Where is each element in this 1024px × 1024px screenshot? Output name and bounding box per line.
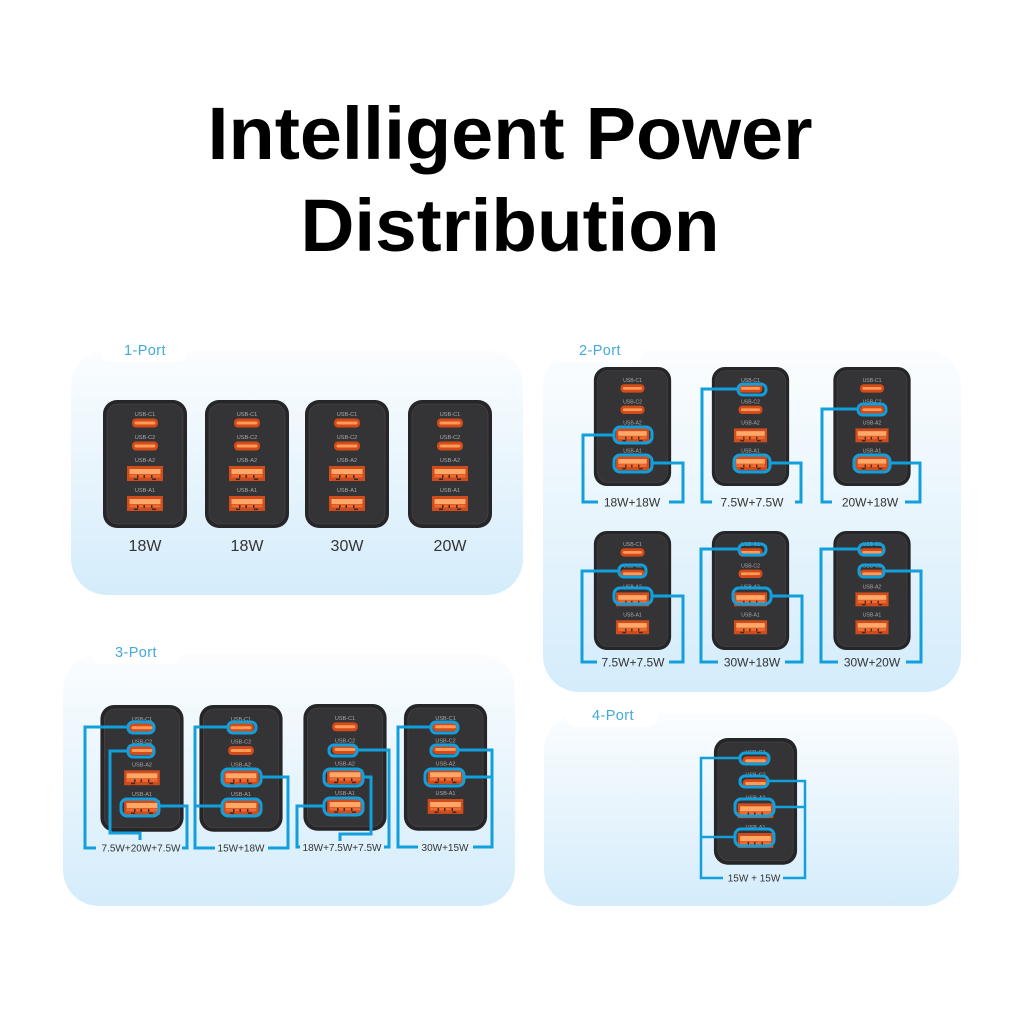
- charger: 18W USB-C2: 18W: [231, 538, 264, 555]
- charger: 18W USB-C1: [103, 400, 187, 555]
- charger: 20W: USB-C2: [440, 435, 460, 441]
- diagram: 30W+20W: USB-C2: [863, 563, 882, 569]
- diagram: 15W + 15W: USB-A2: [746, 795, 765, 801]
- panel: 4-Port: [544, 704, 959, 906]
- panel: 2-Port: [543, 339, 961, 692]
- diagram: 20W+18W: USB-A2: [863, 421, 881, 427]
- diagram: 30W+20W: USB-A2: [863, 585, 881, 591]
- diagram: 30W+18W: USB-A2: [741, 585, 760, 591]
- diagram: 7.5W+7.5W bottom: [582, 531, 683, 670]
- diagram: 15W+18W: USB-A2: [231, 762, 251, 768]
- diagram: 18W+7.5W+7.5W: USB-A2: [335, 761, 355, 767]
- diagram: 7.5W+7.5W bottom: 7.5W+7.5W: [601, 656, 665, 670]
- diagram: 30W+20W: [821, 531, 921, 670]
- diagram: 18W+7.5W+7.5W: USB-C1: [335, 716, 355, 722]
- diagram: 30W+18W: 30W+18W: [724, 656, 781, 670]
- diagram: 30W+15W: USB-C1: [435, 716, 456, 722]
- heading: 3-Port: 3-Port: [115, 645, 157, 661]
- diagram: 30W+15W: USB-A2: [436, 761, 455, 767]
- diagram: 30W+20W: 30W+20W: [844, 656, 901, 670]
- title: Intelligent Power: [208, 92, 812, 175]
- diagram: 30W+20W: USB-A1: [863, 613, 881, 619]
- diagram: 30W+15W: [398, 704, 492, 854]
- diagram: 15W + 15W: [701, 738, 805, 884]
- diagram: 20W+18W: USB-A1: [863, 449, 881, 455]
- diagram: 7.5W+20W+7.5W: [85, 705, 187, 854]
- diagram: 18W+18W: USB-C1: [623, 378, 642, 384]
- diagram: 30W+18W: USB-C2: [741, 563, 760, 569]
- charger: 30W: USB-A2: [337, 458, 357, 464]
- heading: 1-Port: 1-Port: [124, 343, 166, 359]
- diagram: 18W+18W: USB-C2: [623, 399, 642, 405]
- diagram: 18W+7.5W+7.5W: USB-C2: [335, 739, 355, 745]
- diagram: 30W+15W: USB-A1: [436, 791, 455, 797]
- diagram: 7.5W+7.5W bottom: USB-A1: [623, 613, 642, 619]
- charger: 20W: [408, 400, 492, 555]
- diagram: 7.5W+20W+7.5W: USB-A2: [132, 762, 152, 768]
- diagram: 30W+18W: USB-A1: [741, 613, 760, 619]
- charger: 30W: USB-C2: [337, 435, 357, 441]
- charger: 30W: 30W: [331, 538, 364, 555]
- charger: 18W USB-C1: USB-A1: [135, 488, 155, 494]
- charger: 18W USB-C2: USB-A2: [237, 458, 257, 464]
- diagram: 7.5W+20W+7.5W: USB-C1: [132, 717, 152, 723]
- diagram: 20W+18W: USB-C2: [863, 399, 882, 405]
- diagram: 15W+18W: USB-A1: [231, 792, 251, 798]
- diagram: 18W+7.5W+7.5W: [297, 704, 389, 854]
- diagram: 15W+18W: 15W+18W: [218, 844, 265, 854]
- charger: 18W USB-C1: USB-C1: [135, 412, 155, 418]
- charger: 18W USB-C1: USB-A2: [135, 458, 155, 464]
- diagram: 7.5W+7.5W top: USB-A1: [741, 449, 760, 455]
- charger: 30W: [305, 400, 389, 555]
- charger: 18W USB-C1: USB-C2: [135, 435, 155, 441]
- diagram: 7.5W+20W+7.5W: USB-A1: [132, 792, 152, 798]
- diagram: 15W+18W: USB-C1: [231, 717, 251, 723]
- diagram: 15W + 15W: USB-C2: [745, 773, 766, 779]
- panel: 1-Port: [71, 339, 523, 595]
- diagram: 7.5W+20W+7.5W: USB-C2: [132, 740, 152, 746]
- charger: 18W USB-C2: USB-A1: [237, 488, 257, 494]
- diagram: 20W+18W: USB-C1: [863, 378, 882, 384]
- title: [208, 92, 812, 267]
- heading: 4-Port: 4-Port: [592, 708, 634, 724]
- diagram: 30W+18W: [701, 531, 802, 670]
- diagram: 20W+18W: 20W+18W: [842, 496, 899, 510]
- diagram: 20W+18W: [822, 367, 920, 510]
- diagram: 18W+18W: [583, 367, 683, 510]
- diagram: 15W+18W: [195, 705, 288, 854]
- diagram: 7.5W+7.5W top: [702, 367, 801, 510]
- charger: 18W USB-C2: [205, 400, 289, 555]
- diagram: 18W+18W: USB-A1: [623, 449, 642, 455]
- charger: 18W USB-C2: USB-C1: [237, 412, 257, 418]
- diagram: 18W+7.5W+7.5W: 18W+7.5W+7.5W: [303, 843, 382, 854]
- charger: 20W: USB-A2: [440, 458, 460, 464]
- diagram: 18W+7.5W+7.5W: USB-A1: [335, 791, 355, 797]
- diagram: 15W+18W: USB-C2: [231, 740, 251, 746]
- diagram: 18W+18W: USB-A2: [623, 421, 642, 427]
- diagram: 30W+20W: USB-C1: [863, 542, 882, 548]
- charger: 30W: USB-A1: [337, 488, 357, 494]
- title: Distribution: [300, 184, 720, 267]
- panel: 3-Port: [63, 641, 515, 906]
- diagram: 7.5W+20W+7.5W: 7.5W+20W+7.5W: [102, 844, 181, 854]
- charger: 20W: USB-C1: [440, 412, 460, 418]
- diagram: 18W+18W: 18W+18W: [604, 496, 661, 510]
- heading: 2-Port: 2-Port: [579, 343, 621, 359]
- diagram: 15W + 15W: USB-C1: [745, 750, 766, 756]
- diagram: 30W+15W: 30W+15W: [422, 843, 469, 854]
- diagram: 7.5W+7.5W top: 7.5W+7.5W: [720, 496, 784, 510]
- diagram: 30W+15W: USB-C2: [435, 739, 456, 745]
- diagram: 7.5W+7.5W bottom: USB-A2: [623, 585, 642, 591]
- diagram: 7.5W+7.5W bottom: USB-C1: [623, 542, 642, 548]
- diagram: 7.5W+7.5W top: USB-C1: [741, 378, 760, 384]
- charger: 18W USB-C2: USB-C2: [237, 435, 257, 441]
- diagram: 15W + 15W: 15W + 15W: [728, 874, 781, 884]
- charger: 20W: USB-A1: [440, 488, 460, 494]
- charger: 30W: USB-C1: [337, 412, 357, 418]
- diagram: 7.5W+7.5W top: USB-C2: [741, 399, 760, 405]
- charger: 18W USB-C1: 18W: [129, 538, 162, 555]
- charger: 20W: 20W: [434, 538, 467, 555]
- diagram: 15W + 15W: USB-A1: [746, 825, 765, 831]
- diagram: 30W+18W: USB-C1: [741, 542, 760, 548]
- diagram: 7.5W+7.5W top: USB-A2: [741, 421, 760, 427]
- diagram: 7.5W+7.5W bottom: USB-C2: [623, 563, 642, 569]
